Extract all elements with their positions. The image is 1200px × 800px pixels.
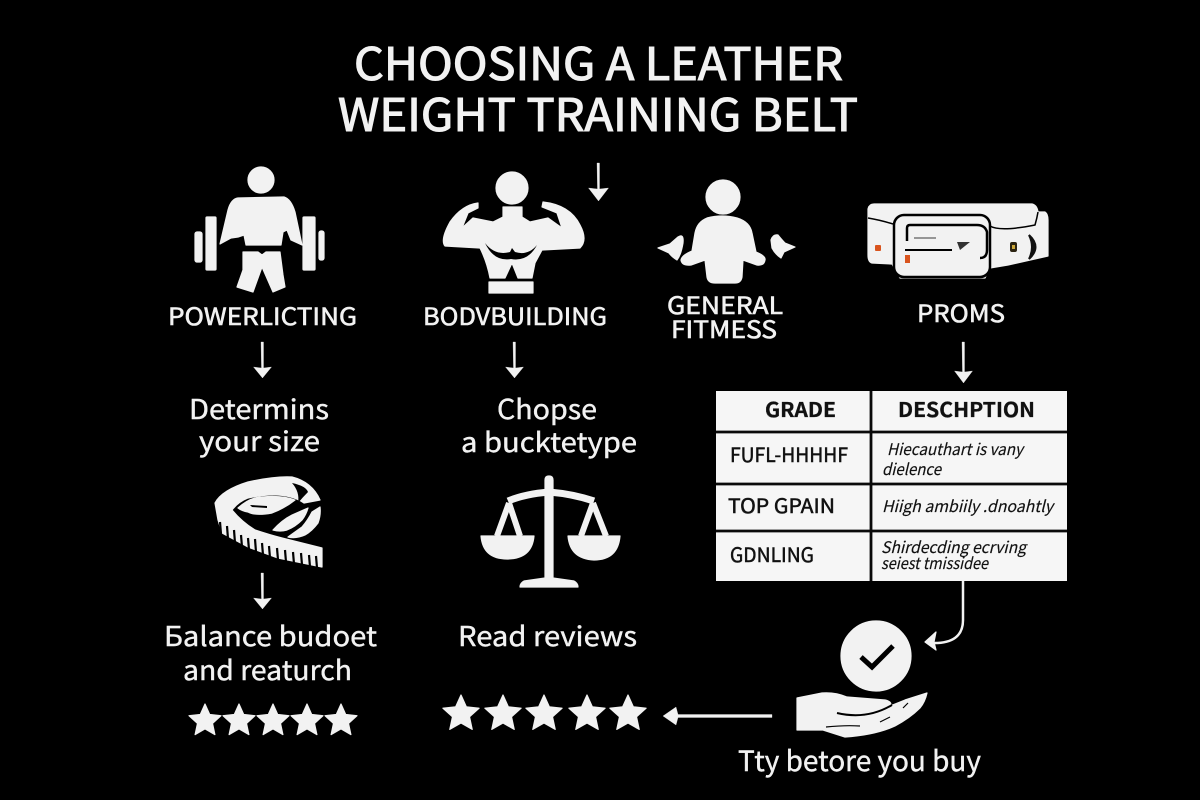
row: full grain bbox=[730, 436, 1026, 480]
title bbox=[338, 28, 858, 144]
icon: bodybuilder bbox=[443, 172, 584, 293]
row: grading: GDNLING bbox=[730, 539, 814, 568]
text: balance budget and features bbox=[164, 615, 377, 688]
row: top grain: Hiigh ambiily .dnoahtly bbox=[882, 493, 1056, 517]
icon: tape measure bbox=[215, 477, 322, 568]
label: general fitness: GENERAL bbox=[667, 286, 783, 321]
icon: powerlifter bbox=[195, 167, 324, 292]
text: balance budget and features: and reaturch bbox=[183, 649, 352, 688]
row: grading bbox=[730, 534, 1028, 574]
row: top grain bbox=[728, 490, 1056, 519]
table: leather grades bbox=[716, 391, 1067, 581]
arrow: table to check hand bbox=[925, 581, 963, 650]
table header: DESCHPTION bbox=[898, 394, 1035, 423]
icon: balance scales bbox=[481, 476, 620, 587]
text: try before you buy: Tty betore you buy bbox=[738, 740, 981, 780]
table header bbox=[765, 394, 1035, 423]
text: choose a buckle type: a bucktetype bbox=[461, 421, 637, 460]
arrow: top down arrow bbox=[588, 163, 608, 201]
row: top grain: TOP GPAIN bbox=[728, 490, 835, 519]
table header: GRADE bbox=[765, 394, 836, 423]
icon: general fitness person bbox=[658, 180, 795, 283]
label: general fitness: FITMESS bbox=[671, 310, 777, 345]
icon: belt bbox=[868, 204, 1048, 278]
label: powerlifting: POWERLICTING bbox=[168, 297, 357, 332]
icon: check in hand bbox=[797, 621, 927, 737]
row: full grain: Hiecauthart is vany bbox=[887, 436, 1026, 460]
title: WEIGHT TRAINING BELT bbox=[338, 79, 858, 144]
text: choose a buckle type: Chopse bbox=[497, 388, 597, 427]
text: determine your size: your size bbox=[199, 420, 320, 459]
text: determine your size bbox=[189, 388, 329, 459]
arrow: powerlifting to size bbox=[254, 342, 272, 378]
icon: five stars right bbox=[443, 695, 646, 729]
arrow: bodybuilding to buckle bbox=[506, 342, 524, 378]
text: choose a buckle type bbox=[461, 388, 637, 460]
row: grading: Shirdecding ecrving bbox=[881, 534, 1028, 558]
text: balance budget and features: Бalance budoet bbox=[164, 615, 377, 654]
text: determine your size: Determins bbox=[189, 388, 329, 427]
arrow: size to budget bbox=[254, 573, 272, 609]
icon: five stars left bbox=[189, 704, 357, 735]
row: full grain: FUFL-HHHHF bbox=[730, 439, 848, 468]
arrow: try before you buy to reviews bbox=[663, 707, 772, 725]
label: bodybuilding: BODVBUILDING bbox=[423, 297, 607, 332]
title: CHOOSING A LEATHER bbox=[354, 28, 843, 93]
label: general fitness bbox=[667, 286, 783, 345]
label: proms: PROMS bbox=[917, 294, 1005, 329]
arrow: proms to table bbox=[954, 342, 972, 383]
row: grading: seiest tmissidee bbox=[881, 550, 990, 574]
text: read reviews: Read reviews bbox=[458, 615, 637, 654]
row: full grain: dielence bbox=[882, 456, 943, 480]
